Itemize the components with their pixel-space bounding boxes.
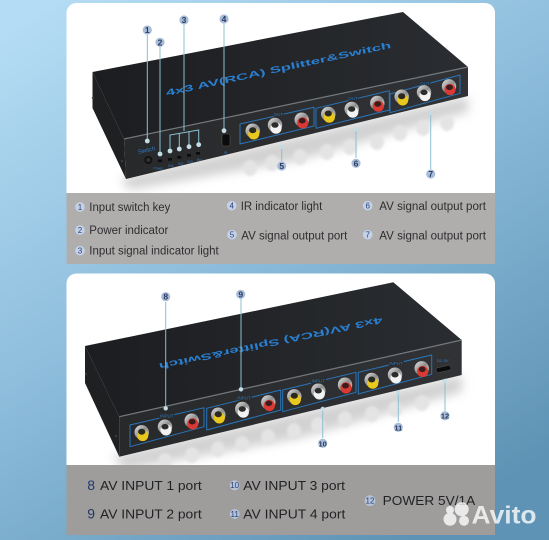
callout 1 [143,25,152,143]
switch key and indicators [138,146,202,170]
callout 3: 3 [182,15,187,25]
legend: rear view [87,477,476,521]
callout 10 [318,407,327,448]
legend item 1: 1 [78,203,83,212]
device title text: 4x3 AV(RCA) Splitter&Switch [165,40,392,98]
input group 11: INPUT [389,361,403,366]
panel: front view legend background [66,193,495,264]
callout 5: 5 [279,161,284,171]
input group 10: INPUT [312,378,325,384]
reflection under rear device [112,375,462,470]
callout 7: 7 [428,169,433,179]
legend: front view [75,201,487,257]
DC power port [436,358,451,373]
switch key and indicators: IN4 [197,158,202,162]
watermark: Avito: Avito [472,501,536,529]
reflection under front device [120,96,468,190]
callout 4 [219,14,229,133]
panel: rear view photo [66,274,495,470]
callout 12: 12 [441,412,449,421]
device title text, upside down: 4x3 AV(RCA) Splitter&Switch [158,315,383,371]
callout 10: 10 [319,439,327,448]
input group 11 [358,355,432,394]
panel: rear view legend background [66,465,495,535]
output group 6 [316,91,389,128]
callout 5 [277,145,286,171]
switch key and indicators: Switch [138,146,156,156]
legend item 3: Input signal indicator light [89,245,219,257]
switch key and indicators: IN2 [178,162,183,166]
input group 9: INPUT [237,396,251,400]
callout 3 [168,15,201,153]
output group 5: OUT [274,112,283,117]
input group 8 [130,408,204,447]
output group 7: OUT [420,81,430,86]
legend item 11: 11 [231,510,239,519]
device: front view [92,12,468,179]
legend item 10: 10 [230,481,240,490]
device: rear view [85,282,462,457]
legend item 3: 3 [78,247,83,256]
callout 11: 11 [394,423,402,432]
callout 6: 6 [354,158,359,168]
callout 7 [426,111,435,179]
panel: front view photo [66,3,495,193]
legend item 6: 6 [365,202,370,211]
callout 1: 1 [145,25,150,35]
DC power port: DC 5V [437,358,449,363]
legend item 6: AV signal output port [379,201,487,213]
legend item 7: AV signal output port [379,230,487,242]
callouts: rear view [161,289,450,448]
legend item 9: AV INPUT 2 port [100,506,202,521]
callout 9 [236,289,245,391]
input group 10 [283,372,356,412]
switch key and indicators: Power [153,166,164,170]
legend item 5: AV signal output port [241,230,348,242]
legend item 5: 5 [230,231,235,240]
switch key and indicators: IN1 [168,164,174,168]
legend item 2: Power indicator [89,225,168,237]
callout 6 [351,127,361,168]
switch key and indicators: IN3 [187,160,193,164]
IR window [222,134,230,155]
legend item 11: AV INPUT 4 port [243,506,346,521]
callouts: front view [143,14,435,179]
legend item 4: 4 [229,202,234,211]
callout 2 [155,37,165,156]
legend item 9: 9 [87,505,95,521]
legend item 2: 2 [78,226,83,235]
legend item 7: 7 [365,231,370,240]
callout 11 [394,390,403,432]
callout 2: 2 [158,37,163,47]
callout 12 [440,379,450,421]
legend item 10: AV INPUT 3 port [243,478,345,493]
legend item 8: AV INPUT 1 port [100,478,202,493]
output group 6: OUT [348,96,358,101]
callout 8 [161,292,170,410]
input group 9 [207,390,281,430]
output group 7 [390,75,460,113]
IR window: IR [224,151,228,155]
callout 8: 8 [163,292,168,302]
legend item 12: POWER 5V/1A [383,493,476,508]
legend item 12: 12 [366,497,375,506]
output group 5 [240,107,314,144]
watermark: Avito [444,501,536,529]
callout 4: 4 [222,14,227,24]
legend item 1: Input switch key [89,202,171,214]
input group 8: INPUT [160,414,174,418]
callout 9: 9 [238,289,243,299]
legend item 4: IR indicator light [241,201,323,213]
legend item 8: 8 [87,477,95,493]
